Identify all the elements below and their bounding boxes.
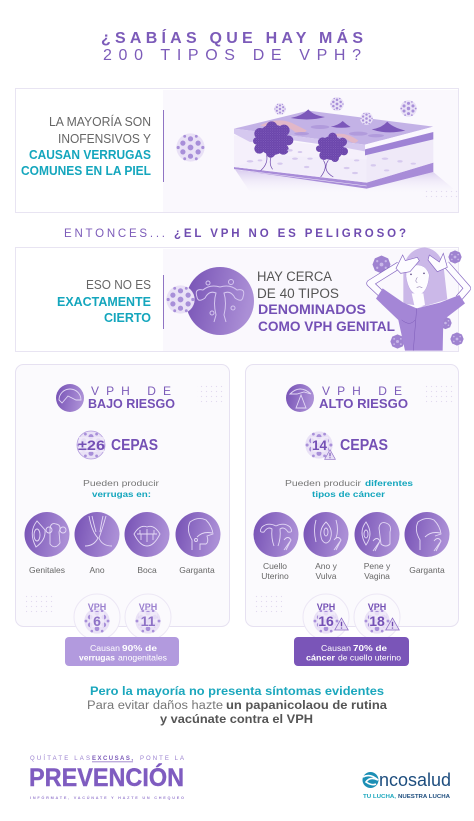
panel: bajo riesgo (16, 364, 230, 626)
callout: 90%: Causan (90, 643, 120, 653)
text: pueden producir verrugas: Pueden producir (83, 478, 159, 488)
text: recomendación final: un papanicolaou de rutina (226, 700, 388, 712)
text: la mayoría son inofensivos: INOFENSIVOS Y (58, 132, 152, 146)
badge: vph 16: VPH (317, 602, 335, 612)
callout: 70%: de cuello uterino (338, 652, 401, 662)
icon: garganta (176, 512, 220, 557)
text: eso no es exactamente cierto: ESO NO ES (86, 278, 151, 292)
text: la mayoría son inofensivos (21, 114, 152, 178)
icon: genitales (24, 512, 70, 557)
icon: floating viruses (274, 97, 417, 125)
labels: zonas: Ano y (315, 561, 338, 571)
text: hay cerca de 40 tipos: DENOMINADOS (258, 302, 366, 317)
title: 200 TIPOS DE VPH? (103, 47, 361, 64)
illustration: skin layers (234, 109, 453, 195)
labels: zonas: Uterino (261, 571, 289, 581)
callout: 90%: verrugas (79, 652, 115, 662)
labels: zonas: Boca (137, 565, 157, 575)
heading: vph de bajo riesgo (88, 384, 175, 411)
labels: zonas: Cuello (263, 561, 287, 571)
badge: vph 18 (354, 594, 400, 640)
panel: inofensivos (16, 88, 458, 212)
icon: ano y vulva (304, 512, 348, 557)
icon: virus (166, 285, 195, 314)
labels: zonas: Garganta (179, 565, 215, 575)
icon: boca (124, 512, 170, 557)
icon: cuello uterino (254, 512, 298, 557)
text: pueden producir cáncer: tipos de cáncer (312, 489, 386, 499)
stat: 14 cepas: CEPAS (340, 437, 388, 454)
text: recomendación final: Pero la mayoría no presenta síntomas evidentes (90, 686, 384, 698)
labels: zonas: Vagina (364, 571, 390, 581)
subheading: ENTONCES... (64, 228, 165, 240)
title (101, 28, 363, 64)
text: la mayoría son inofensivos: CAUSAN VERRUGAS (29, 148, 151, 162)
stat: 14 cepas (305, 431, 388, 459)
text: eso no es exactamente cierto: EXACTAMENTE (57, 295, 151, 309)
stat: 26 cepas: CEPAS (111, 437, 158, 454)
labels: zonas: Pene y (364, 561, 391, 571)
text: recomendación final: y vacúnate contra el VPH (160, 714, 313, 726)
icon: low risk gauge (56, 384, 84, 412)
labels: zonas (261, 561, 445, 581)
heading: vph de alto riesgo (319, 384, 408, 411)
text: pueden producir verrugas (83, 478, 159, 499)
heading: vph de alto riesgo: VPH DE (322, 384, 402, 398)
callout: 90% (65, 637, 179, 666)
text: la mayoría son inofensivos: LA MAYORÍA SON (49, 114, 151, 129)
text: hay cerca de 40 tipos: DE 40 TIPOS (257, 286, 339, 301)
text: pueden producir cáncer: Pueden producir (285, 478, 361, 488)
badge: vph 11: 11 (141, 613, 156, 629)
callout: 70%: cáncer (306, 652, 336, 662)
callout: 90%: 90% de (122, 643, 157, 653)
icon: high risk gauge (286, 384, 314, 412)
labels: zonas: Genitales (29, 565, 65, 575)
badge: vph 16: 16 (318, 613, 334, 629)
stat: 26 cepas (77, 431, 158, 459)
illustration: worried woman (370, 247, 467, 351)
heading: vph de alto riesgo: ALTO RIESGO (319, 396, 408, 411)
labels: zonas: Vulva (316, 571, 337, 581)
stat: 14 cepas: 14 (312, 437, 327, 453)
badge: vph 18: 18 (369, 613, 385, 629)
badge: vph 18: VPH (368, 602, 386, 612)
logo: prevención: EXCUSAS, (92, 756, 133, 762)
logo: prevención (29, 755, 184, 800)
logo: prevención: PONTE LA (140, 756, 184, 762)
logo: prevención: INFÓRMATE, VACÚNATE Y HAZTE UN CHEQUEO (30, 795, 184, 800)
badge: vph 6: VPH (88, 602, 106, 612)
logo: oncosalud: TU LUCHA, (363, 794, 397, 800)
icon: garganta (404, 512, 450, 557)
callout: 70%: 70% de (353, 643, 387, 653)
callout: 70%: Causan (321, 643, 351, 653)
icon: dark viruses (372, 250, 464, 349)
badge: vph 6: 6 (93, 613, 101, 629)
badge: vph 11: VPH (139, 602, 157, 612)
badge: vph 11 (125, 594, 171, 640)
subheading (64, 228, 406, 240)
logo: oncosalud: NUESTRA LUCHA (398, 794, 450, 800)
text: recomendación final (87, 686, 388, 726)
text: hay cerca de 40 tipos: COMO VPH GENITAL (258, 319, 395, 334)
stat: 26 cepas: ±26 (78, 437, 105, 453)
labels: zonas: Garganta (409, 565, 445, 575)
text: pueden producir cáncer (285, 478, 413, 499)
icon: virus (176, 133, 205, 162)
labels: zonas: Ano (89, 565, 105, 575)
callout: 90%: anogenitales (118, 652, 167, 662)
text: eso no es exactamente cierto: CIERTO (104, 311, 151, 325)
logo: oncosalud: ncosalud (379, 770, 451, 790)
text: pueden producir cáncer: diferentes (365, 478, 413, 488)
text: pueden producir verrugas: verrugas en: (92, 489, 151, 499)
badge: vph 6 (74, 594, 120, 640)
heading: vph de bajo riesgo: BAJO RIESGO (88, 396, 175, 411)
callout: 70% (294, 637, 409, 666)
title: ¿SABÍAS QUE HAY MÁS (101, 28, 363, 47)
logo: prevención: QUÍTATE LAS (30, 755, 90, 762)
subheading: ¿EL VPH NO ES PELIGROSO? (174, 228, 406, 240)
badge: vph 16 (303, 594, 349, 640)
labels: zonas (29, 565, 215, 575)
text: eso no es exactamente cierto (57, 278, 151, 325)
panel: vph genital (16, 247, 467, 352)
icon: pene y vagina (354, 512, 400, 557)
text: hay cerca de 40 tipos (257, 269, 395, 334)
text: recomendación final: Para evitar daños hazte (87, 700, 223, 712)
panel: alto riesgo (246, 364, 458, 626)
heading: vph de bajo riesgo: VPH DE (91, 384, 171, 398)
logo: prevención: PREVENCIÓN (29, 762, 184, 792)
text: la mayoría son inofensivos: COMUNES EN LA PIEL (21, 164, 151, 178)
icon: uterus circle (186, 267, 254, 335)
logo: oncosalud (362, 770, 451, 800)
dots pattern (423, 188, 458, 200)
text: hay cerca de 40 tipos: HAY CERCA (257, 269, 332, 284)
icon: ano (74, 512, 120, 557)
